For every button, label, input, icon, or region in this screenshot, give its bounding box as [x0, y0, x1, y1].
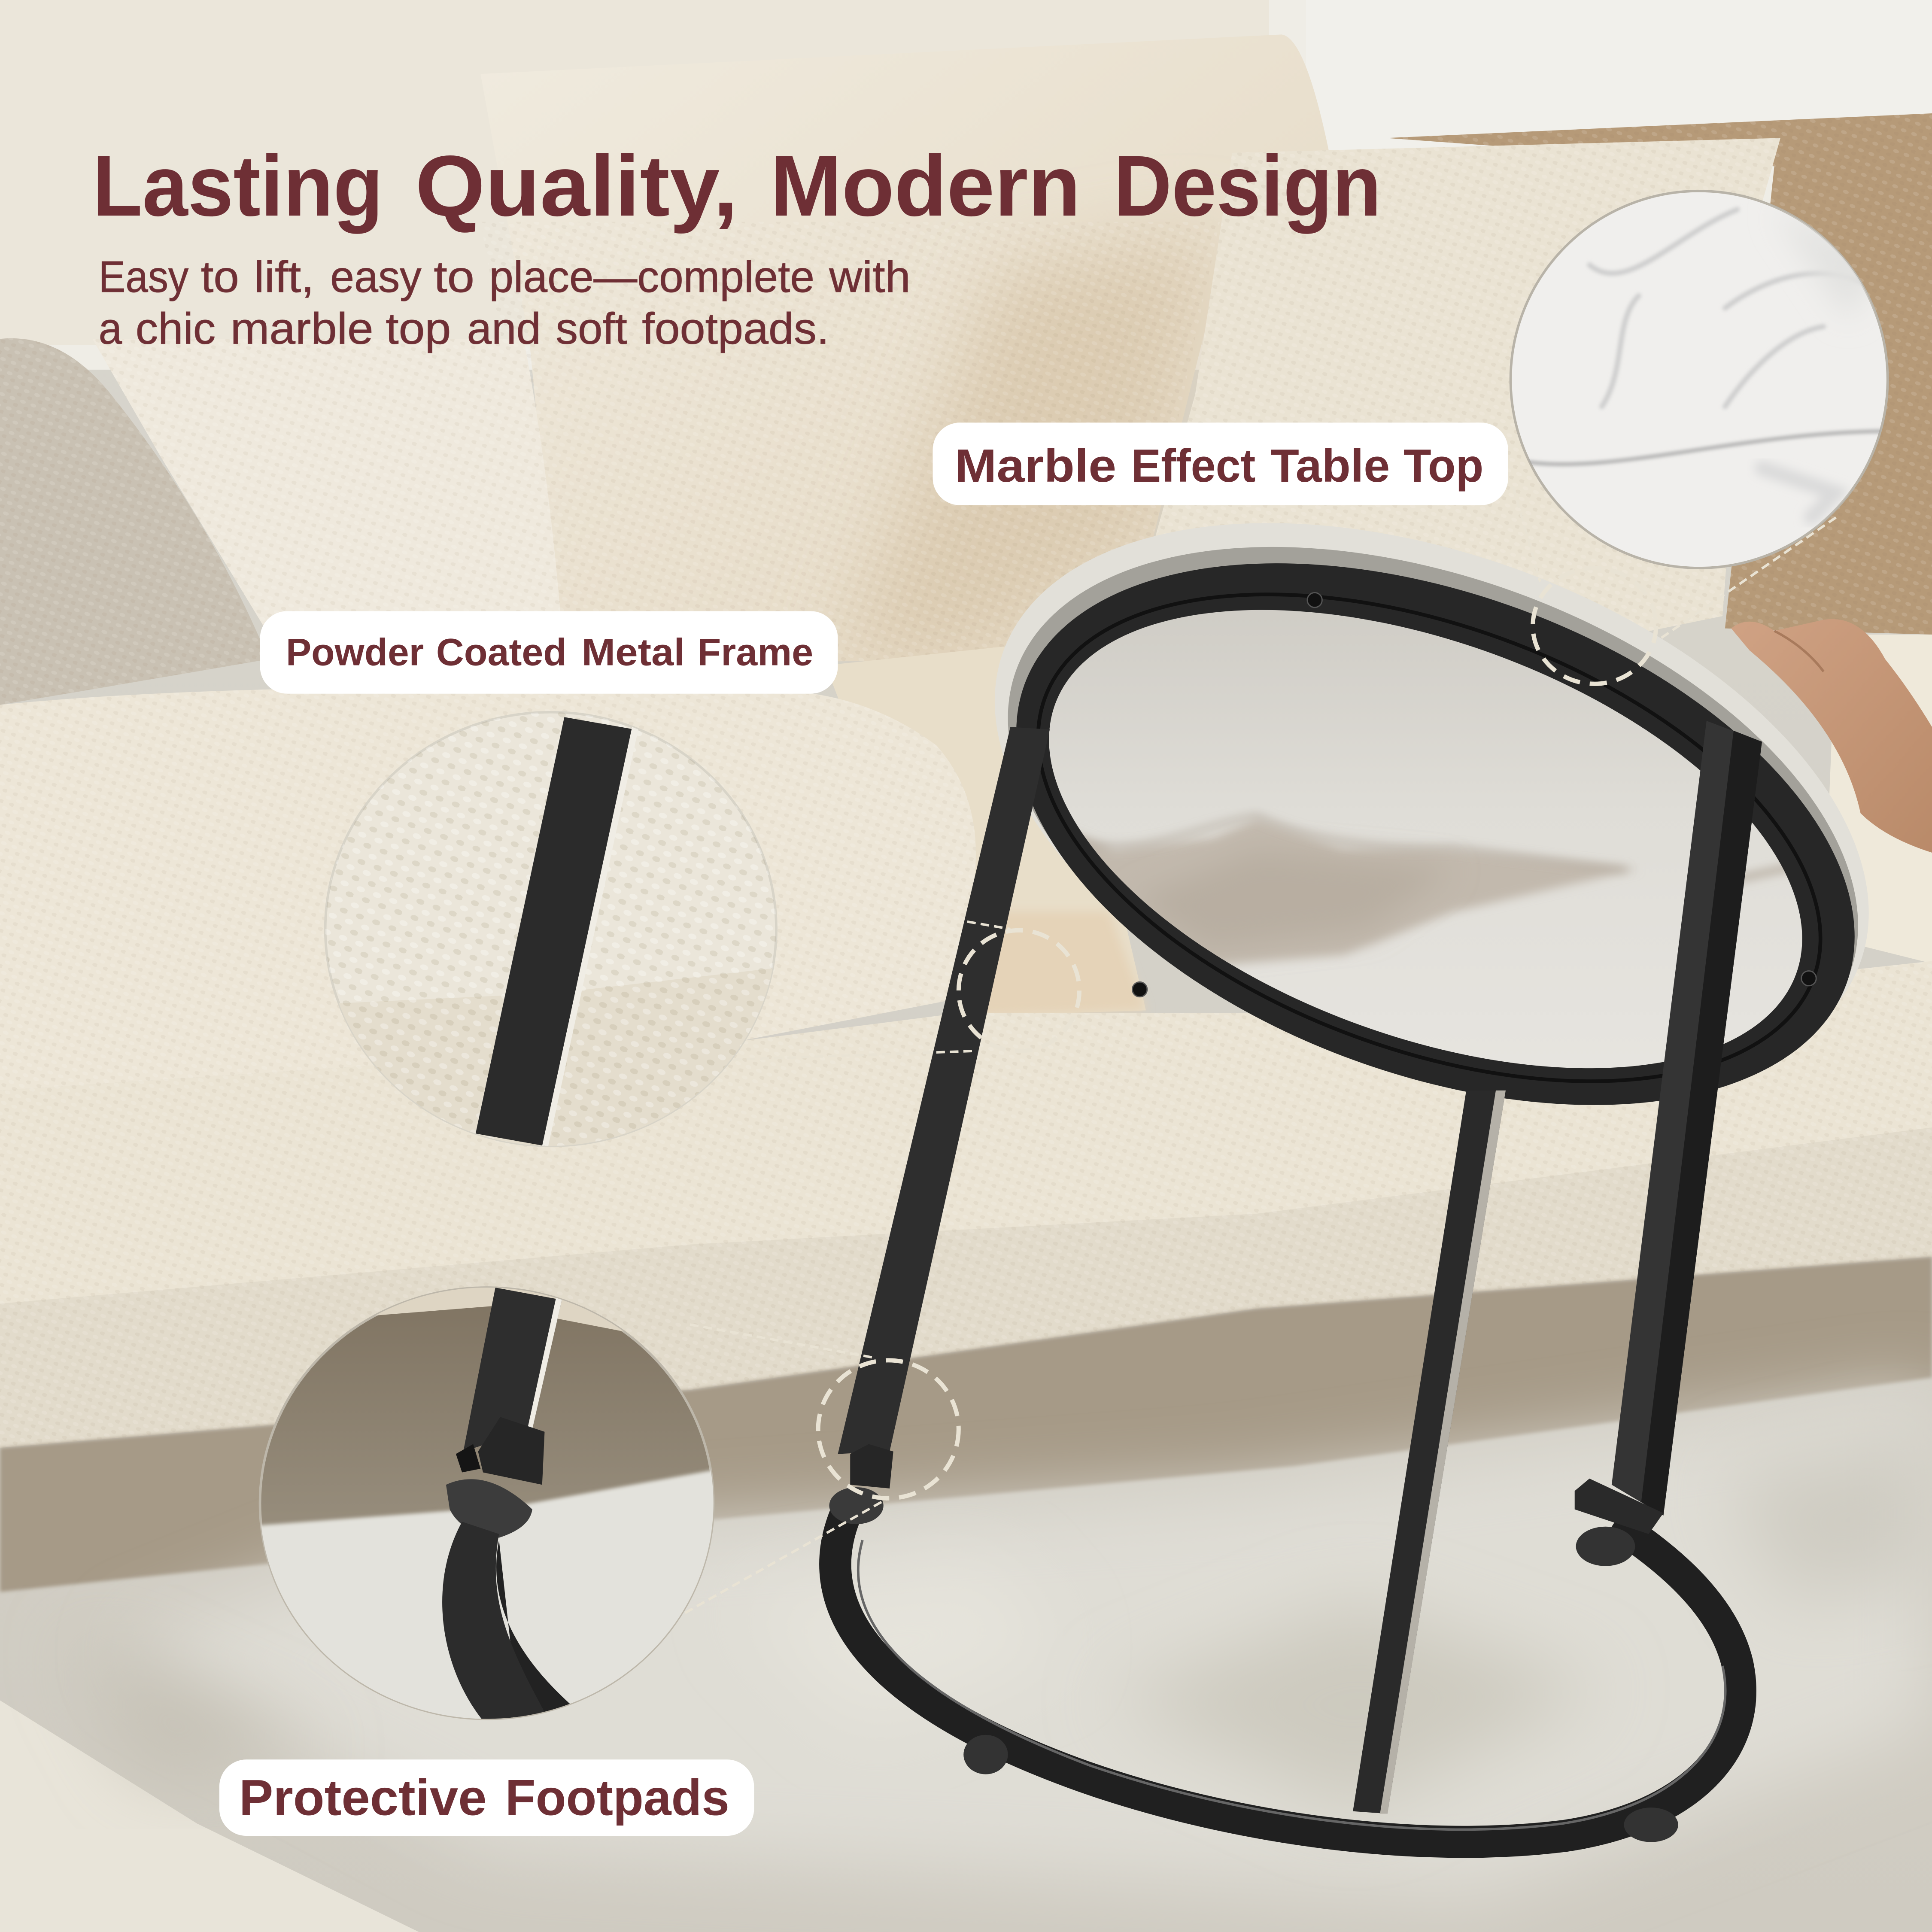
heading: Modern	[770, 137, 1081, 234]
bracket: left foot	[850, 1444, 893, 1488]
subtitle: marble	[231, 304, 374, 353]
rear seat cushion	[826, 641, 1146, 1017]
label: protective footpads	[219, 1759, 754, 1836]
footpad: bottom right	[1624, 1807, 1678, 1842]
label: marble effect table top	[933, 422, 1508, 505]
middle leg	[1353, 1091, 1506, 1814]
subtitle: to	[201, 252, 239, 301]
rug highlights	[123, 1392, 1932, 1898]
subtitle	[99, 252, 911, 353]
dashed circle: marble detail	[1533, 568, 1656, 684]
subtitle: place—complete	[489, 252, 814, 301]
dashed circle: frame detail	[959, 930, 1079, 1051]
right side seat	[1823, 635, 1932, 963]
bracket: right foot	[1575, 1479, 1663, 1534]
sofa front panel	[0, 961, 1932, 1448]
metal ring	[942, 459, 1929, 1209]
subtitle: and	[467, 304, 541, 353]
label: powder coated metal frame: Frame	[697, 631, 813, 674]
callout: metal frame zoom circle	[320, 702, 782, 1152]
label: powder coated metal frame: Powder	[286, 631, 424, 674]
subtitle: lift,	[254, 252, 314, 301]
heading	[92, 137, 1381, 234]
label: marble effect table top: Marble	[955, 440, 1116, 492]
label: powder coated metal frame: Coated	[436, 631, 567, 674]
subtitle: top	[386, 304, 451, 353]
label: protective footpads: Footpads	[505, 1769, 729, 1826]
subtitle: footpads.	[642, 304, 829, 353]
subtitle: Easy	[99, 252, 188, 301]
base ring	[835, 1510, 1741, 1842]
subtitle: easy	[330, 252, 422, 301]
shadow beneath sofa	[0, 1257, 1932, 1592]
subtitle: a	[99, 304, 122, 353]
marble underside	[1049, 610, 1802, 1068]
sofa back cushion	[480, 34, 1331, 665]
footpad: bottom left	[963, 1735, 1008, 1774]
grey throw pillow	[0, 338, 269, 705]
table top edge	[917, 414, 1932, 1200]
cream pillow	[1152, 138, 1780, 641]
label: marble effect table top: Top	[1403, 440, 1483, 492]
screws	[1307, 592, 1322, 608]
label: powder coated metal frame	[260, 611, 838, 694]
heading: Lasting	[92, 137, 383, 234]
icon: hand holding table	[1731, 619, 1932, 853]
callout: marble zoom circle	[1510, 191, 1888, 568]
heading: Quality,	[415, 137, 738, 234]
left back cushion	[92, 339, 561, 629]
footpad: right joint	[1576, 1527, 1635, 1566]
label: marble effect table top: Table	[1270, 440, 1390, 492]
label: protective footpads: Protective	[239, 1769, 487, 1826]
dashed leader lines	[685, 487, 1836, 1613]
brown pillow	[1386, 113, 1932, 635]
label: powder coated metal frame: Metal	[582, 631, 685, 674]
table underside grey band	[933, 441, 1932, 1203]
front seat cushion	[0, 687, 976, 1091]
subtitle: to	[434, 252, 474, 301]
heading: Design	[1114, 137, 1381, 234]
left leg	[838, 727, 1050, 1454]
subtitle: chic	[136, 304, 216, 353]
label: marble effect table top: Effect	[1131, 440, 1255, 492]
subtitle: soft	[556, 304, 627, 353]
right leg	[1612, 721, 1762, 1516]
table	[819, 523, 1868, 1858]
dashed circle: footpad detail	[818, 1360, 959, 1498]
callout: footpad zoom circle	[259, 1282, 721, 1725]
footpad: left joint	[829, 1487, 884, 1524]
subtitle: with	[829, 252, 911, 301]
